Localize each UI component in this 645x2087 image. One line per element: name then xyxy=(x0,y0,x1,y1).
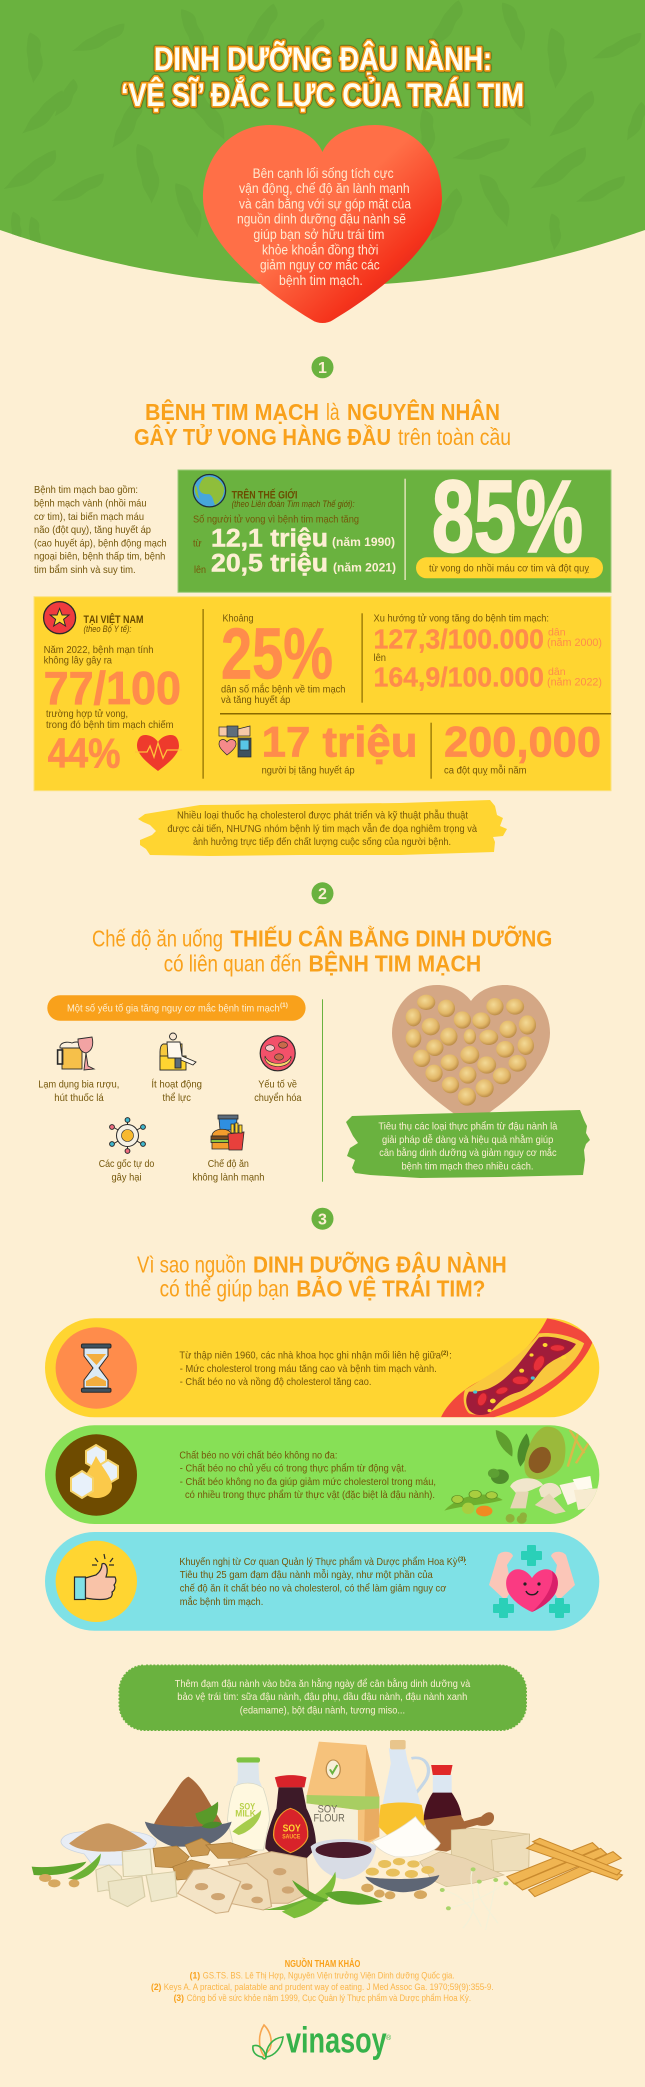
edamame centre xyxy=(263,1872,427,1918)
logo: vinasoy xyxy=(253,2020,392,2061)
icon: person on sofa xyxy=(160,1033,196,1070)
panel: world statistics: từ xyxy=(193,538,202,550)
panel: Vietnam statistics: TẠI VIỆT NAM xyxy=(84,613,144,626)
heart intro panel: nguồn dinh dưỡng đậu nành sẽ xyxy=(237,212,406,227)
references: Keys A. A practical, palatable and prudent way of eating. J Med Assoc Ga. 1970;59(9):355-9. xyxy=(164,1982,494,1993)
callout: yellow brush note: được cải tiến, NHƯNG nhóm bệnh lý tim mạch vẫn đe dọa nghiêm trọng và xyxy=(167,822,477,835)
panel: history pill: (2) xyxy=(441,1351,448,1357)
flour mound xyxy=(372,1817,440,1857)
section 3 heading: DINH DƯỠNG ĐẬU NÀNH xyxy=(253,1250,507,1277)
intro text: cardiovascular diseases: Bệnh tim mạch bao gồm: xyxy=(34,484,138,496)
risk factors pill: Một số yếu tố gia tăng nguy cơ mắc bệnh tim mạch xyxy=(67,1002,280,1014)
panel: Vietnam statistics: (theo Bộ Y tế): xyxy=(84,624,132,634)
tempeh xyxy=(178,1852,309,1913)
icon: beer and wine xyxy=(58,1037,94,1070)
title xyxy=(121,41,524,113)
panel: world statistics: (năm 1990) xyxy=(332,535,395,549)
panel: Vietnam statistics: trong đó bệnh tim mạch chiếm xyxy=(46,719,174,731)
callout: green stamp note: (edamame), bột đậu nành, tương miso... xyxy=(240,1704,405,1716)
panel: Vietnam statistics: lên xyxy=(374,652,386,664)
references: (2) xyxy=(151,1982,161,1993)
panel: Vietnam statistics: Xu hướng tử vong tăng do bệnh tim mạch: xyxy=(374,612,549,624)
callout: green brush note xyxy=(346,1110,590,1178)
caption xyxy=(151,1078,202,1104)
panel: Vietnam statistics: 127,3/100.000 xyxy=(374,623,544,654)
panel: Vietnam statistics: 200,000 xyxy=(444,719,601,767)
yuba sticks xyxy=(507,1838,622,1897)
references: (3) xyxy=(174,1993,184,2004)
caption: hút thuốc lá xyxy=(54,1092,104,1104)
icon: globe xyxy=(193,474,226,507)
section 1 heading: BỆNH TIM MẠCH xyxy=(145,398,319,425)
bean sprouts xyxy=(440,1867,508,1930)
references: (1) xyxy=(190,1970,200,1982)
callout pill: 85% xyxy=(416,557,603,578)
section 2 heading xyxy=(92,925,552,977)
panel: world statistics: 20,5 triệu xyxy=(211,550,328,578)
panel: Vietnam statistics: người bị tăng huyết áp xyxy=(262,764,355,776)
caption: Các gốc tự do xyxy=(99,1158,154,1170)
panel: FDA recommendation pill: Khuyến nghị từ Cơ quan Quản lý Thực phẩm và Dược phẩm Hoa Kỳ xyxy=(179,1556,458,1568)
caption: Yếu tố về xyxy=(258,1078,297,1090)
flour bag: SOY xyxy=(318,1803,337,1815)
icon: hourglass xyxy=(81,1344,111,1392)
heart intro panel: vận động, chế độ ăn lành mạnh xyxy=(239,181,410,196)
soybean bowl xyxy=(365,1858,439,1892)
icon: free radicals xyxy=(110,1118,145,1153)
heart of soybeans xyxy=(392,985,550,1125)
panel: Vietnam statistics: và tăng huyết áp xyxy=(221,694,291,706)
panel: FDA recommendation pill: Tiêu thụ 25 gam đạm đậu nành mỗi ngày, như một phần của xyxy=(180,1568,433,1581)
panel: world statistics: 85% xyxy=(432,460,583,574)
panel: FDA recommendation pill xyxy=(45,1532,599,1631)
panel: FDA recommendation pill: : xyxy=(464,1556,467,1568)
caption: Chế độ ăn xyxy=(208,1158,249,1170)
panel: world statistics: (theo Liên đoàn Tim mạch Thế giới): xyxy=(232,499,355,509)
section 1 number badge xyxy=(312,356,334,378)
soy milk bottle: MILK xyxy=(235,1810,256,1819)
panel: fats pill xyxy=(45,1425,599,1524)
soy milk bottle: SOY xyxy=(239,1802,255,1812)
section 1 number badge: 1 xyxy=(318,360,327,377)
caption: Ít hoạt động xyxy=(151,1078,202,1090)
panel: history pill: - Chất béo no và nồng độ cholesterol tăng cao. xyxy=(180,1376,372,1388)
title: DINH DƯỠNG ĐẬU NÀNH: xyxy=(154,41,492,77)
panel: Vietnam statistics: 17 triệu xyxy=(262,719,418,767)
caption: thể lực xyxy=(162,1092,191,1104)
references: GS.TS. BS. Lê Thị Hợp, Nguyên Viện trưởng Viện Dinh dưỡng Quốc gia. xyxy=(203,1970,454,1982)
icon: oil drop and hexagons xyxy=(71,1445,118,1498)
panel: fats pill: có nhiều trong thực phẩm từ thực vật (đặc biệt là đậu nành). xyxy=(185,1489,435,1501)
header: green curved banner xyxy=(0,0,645,286)
section 1 heading: NGUYÊN NHÂN xyxy=(347,398,500,425)
section 3 heading: BẢO VỆ TRÁI TIM? xyxy=(296,1274,485,1302)
callout: green brush note: cân bằng dinh dưỡng và giảm nguy cơ mắc xyxy=(379,1146,557,1159)
panel: Vietnam statistics: 164,9/100.000 xyxy=(374,662,544,693)
edamame left xyxy=(32,1853,101,1887)
risk factors pill: (1) xyxy=(280,1002,288,1009)
heart intro panel: và cân bằng với sự góp mặt của xyxy=(239,196,411,211)
callout: green brush note: bệnh tim mạch theo nhiều cách. xyxy=(402,1160,534,1172)
section 1 heading: trên toàn cầu xyxy=(398,424,511,450)
intro text: cardiovascular diseases: cơ tim), tai biến mạch máu xyxy=(34,511,144,523)
intro text: cardiovascular diseases: não (đột quỵ), tăng huyết áp xyxy=(34,524,151,536)
heart intro panel: giảm nguy cơ mắc các xyxy=(260,258,380,273)
section 2 heading: THIẾU CÂN BẰNG DINH DƯỠNG xyxy=(230,925,552,952)
oil jug xyxy=(378,1740,429,1837)
callout: green stamp note: Thêm đạm đậu nành vào bữa ăn hằng ngày để cân bằng dinh dưỡng và xyxy=(175,1677,470,1690)
panel: Vietnam statistics: Năm 2022, bệnh mạn tính xyxy=(44,644,154,656)
section 3 heading: Vì sao nguồn xyxy=(137,1251,246,1277)
caption xyxy=(99,1158,154,1184)
section 2 heading: có liên quan đến xyxy=(164,951,302,977)
icon: blood pressure monitor xyxy=(219,726,251,757)
crumbled tofu xyxy=(420,1852,504,1887)
intro text: cardiovascular diseases: (cao huyết áp), bệnh động mạch xyxy=(34,538,167,550)
caption: Lạm dụng bia rượu, xyxy=(38,1078,119,1090)
panel: fats pill: Chất béo no với chất béo không no đa: xyxy=(179,1450,337,1462)
icon: thumbs up xyxy=(74,1554,116,1600)
section 1 heading xyxy=(134,398,511,450)
panel: Vietnam statistics: (năm 2022) xyxy=(547,676,602,688)
callout: green brush note: giải pháp dễ dàng và hiệu quả nhằm giúp xyxy=(382,1133,553,1146)
panel: FDA recommendation pill: (3) xyxy=(458,1557,465,1563)
caption xyxy=(38,1078,119,1104)
panel: history pill: : xyxy=(449,1350,452,1362)
small soy sauce bottle xyxy=(424,1765,462,1820)
callout pill: 85%: từ vong do nhồi máu cơ tim và đột quỵ xyxy=(429,562,590,574)
panel: world statistics: (năm 2021) xyxy=(333,561,396,575)
heart intro panel xyxy=(203,125,442,323)
flour bag: FLOUR xyxy=(313,1812,345,1824)
panel: Vietnam statistics: không lây gây ra xyxy=(44,654,112,666)
soybean pod pattern xyxy=(0,0,645,254)
white bowl with soy flour xyxy=(61,1823,156,1865)
miso bowl xyxy=(145,1777,232,1847)
fried tofu pieces xyxy=(153,1838,257,1880)
panel: world statistics: Số người tử vong vì bệnh tim mạch tăng xyxy=(193,514,359,526)
icon: heart with pulse xyxy=(135,735,182,771)
caption xyxy=(192,1158,265,1184)
soy sauce bottle: SOY xyxy=(283,1824,301,1834)
callout: yellow brush note: ảnh hưởng trực tiếp đến chất lượng cuộc sống của người bệnh. xyxy=(193,836,451,848)
callout: yellow brush note xyxy=(138,800,507,856)
caption xyxy=(254,1078,302,1104)
logo: vinasoy: vinasoy xyxy=(286,2020,387,2061)
panel: history pill xyxy=(45,1318,599,1417)
panel: history pill: Từ thập niên 1960, các nhà khoa học ghi nhận mối liên hệ giữa xyxy=(179,1350,441,1362)
panel: Vietnam statistics: Khoảng xyxy=(222,612,254,624)
scoop xyxy=(424,1812,494,1852)
section 2 heading: Chế độ ăn uống xyxy=(92,926,223,952)
references: Công bố về sức khỏe năm 1999, Cục Quản lý Thực phẩm và Dược phẩm Hoa Kỳ. xyxy=(187,1993,471,2004)
references: NGUỒN THAM KHẢO xyxy=(285,1957,360,1970)
soy milk bottle xyxy=(228,1757,269,1850)
icon: strong heart xyxy=(489,1545,575,1618)
panel: Vietnam statistics: dân xyxy=(548,626,566,638)
panel: Vietnam statistics xyxy=(34,597,611,791)
caption: chuyển hóa xyxy=(254,1092,302,1104)
callout: green stamp note: bảo vệ trái tim: sữa đậu nành, đậu phụ, dầu đậu nành, đậu nành xanh xyxy=(177,1691,467,1703)
panel: world statistics: 12,1 triệu xyxy=(211,525,328,553)
panel: Vietnam statistics: dân số mắc bệnh về tim mạch xyxy=(221,682,346,696)
callout: green stamp note xyxy=(118,1664,527,1731)
panel: fats pill: - Chất béo no chủ yếu có trong thực phẩm từ động vật. xyxy=(180,1462,406,1474)
panel: Vietnam statistics: trường hợp tử vong, xyxy=(46,708,128,720)
heart intro panel: Bên cạnh lối sống tích cực xyxy=(253,166,394,181)
section 2 number badge: 2 xyxy=(318,886,327,903)
heart intro panel: giúp bạn sở hữu trái tim xyxy=(253,227,384,242)
icon: fast food xyxy=(211,1115,244,1150)
flour bag xyxy=(306,1742,379,1842)
tofu cubes xyxy=(96,1849,177,1907)
caption: không lành mạnh xyxy=(192,1172,265,1184)
panel: fats pill: - Chất béo không no đa giúp giảm mức cholesterol trong máu, xyxy=(180,1476,436,1488)
panel: world statistics: lên xyxy=(194,564,206,576)
heart intro panel: bệnh tim mạch. xyxy=(279,273,363,288)
section 3 heading xyxy=(137,1250,507,1302)
panel: world statistics: TRÊN THẾ GIỚI xyxy=(232,488,297,502)
panel: FDA recommendation pill: chế độ ăn ít chất béo no và cholesterol, có thể làm giảm nguy cơ xyxy=(180,1582,446,1594)
section 2 number badge xyxy=(312,882,334,904)
section 3 number badge xyxy=(312,1208,334,1230)
intro text: cardiovascular diseases xyxy=(34,484,167,576)
illustration: soy food products xyxy=(32,1740,622,1930)
title: ‘VỆ SĨ’ ĐẮC LỰC CỦA TRÁI TIM xyxy=(121,77,524,113)
panel: Vietnam statistics: (năm 2000) xyxy=(547,637,602,649)
panel: Vietnam statistics: 44% xyxy=(48,729,121,776)
caption: gây hại xyxy=(112,1172,142,1184)
soy sauce bottle: SAUCE xyxy=(282,1834,301,1840)
panel: Vietnam statistics: dân xyxy=(548,666,566,678)
intro text: cardiovascular diseases: bệnh mạch vành (nhồi máu xyxy=(34,498,147,510)
section 3 number badge: 3 xyxy=(318,1212,327,1228)
risk factors pill xyxy=(47,995,306,1021)
intro text: cardiovascular diseases: tim bẩm sinh và suy tim. xyxy=(34,564,136,576)
soy sauce bottle xyxy=(265,1775,316,1858)
intro text: cardiovascular diseases: ngoại biên, bệnh thấp tim, bệnh xyxy=(34,550,166,562)
section 1 heading: GÂY TỬ VONG HÀNG ĐẦU xyxy=(134,422,391,450)
illustration: plant foods xyxy=(444,1427,597,1524)
section 3 heading: có thể giúp bạn xyxy=(160,1276,289,1302)
panel: Vietnam statistics: 77/100 xyxy=(44,662,181,714)
section 2 heading: BỆNH TIM MẠCH xyxy=(308,950,481,977)
callout: yellow brush note: Nhiều loại thuốc hạ cholesterol được phát triển và kỹ thuật phẫu thuật xyxy=(177,808,468,822)
panel: history pill: - Mức cholesterol trong máu tăng cao và bệnh tim mạch vành. xyxy=(180,1363,437,1375)
icon: Vietnam star xyxy=(44,602,76,634)
callout: green brush note: Tiêu thụ các loại thực phẩm từ đậu nành là xyxy=(378,1120,558,1132)
panel: FDA recommendation pill: mắc bệnh tim mạch. xyxy=(180,1595,263,1608)
panel: world statistics xyxy=(178,460,611,592)
tofu block xyxy=(451,1828,529,1872)
references xyxy=(151,1957,494,2004)
panel: Vietnam statistics: 25% xyxy=(221,614,333,694)
panel: Vietnam statistics: ca đột quỵ mỗi năm xyxy=(444,764,527,776)
illustration: clogged artery xyxy=(441,1318,593,1417)
heart intro panel: khỏe khoắn đồng thời xyxy=(262,242,378,257)
sauce dish xyxy=(311,1839,376,1879)
icon: metabolism xyxy=(260,1036,295,1071)
section 1 heading: là xyxy=(326,399,340,425)
logo: vinasoy: ® xyxy=(386,2034,392,2042)
